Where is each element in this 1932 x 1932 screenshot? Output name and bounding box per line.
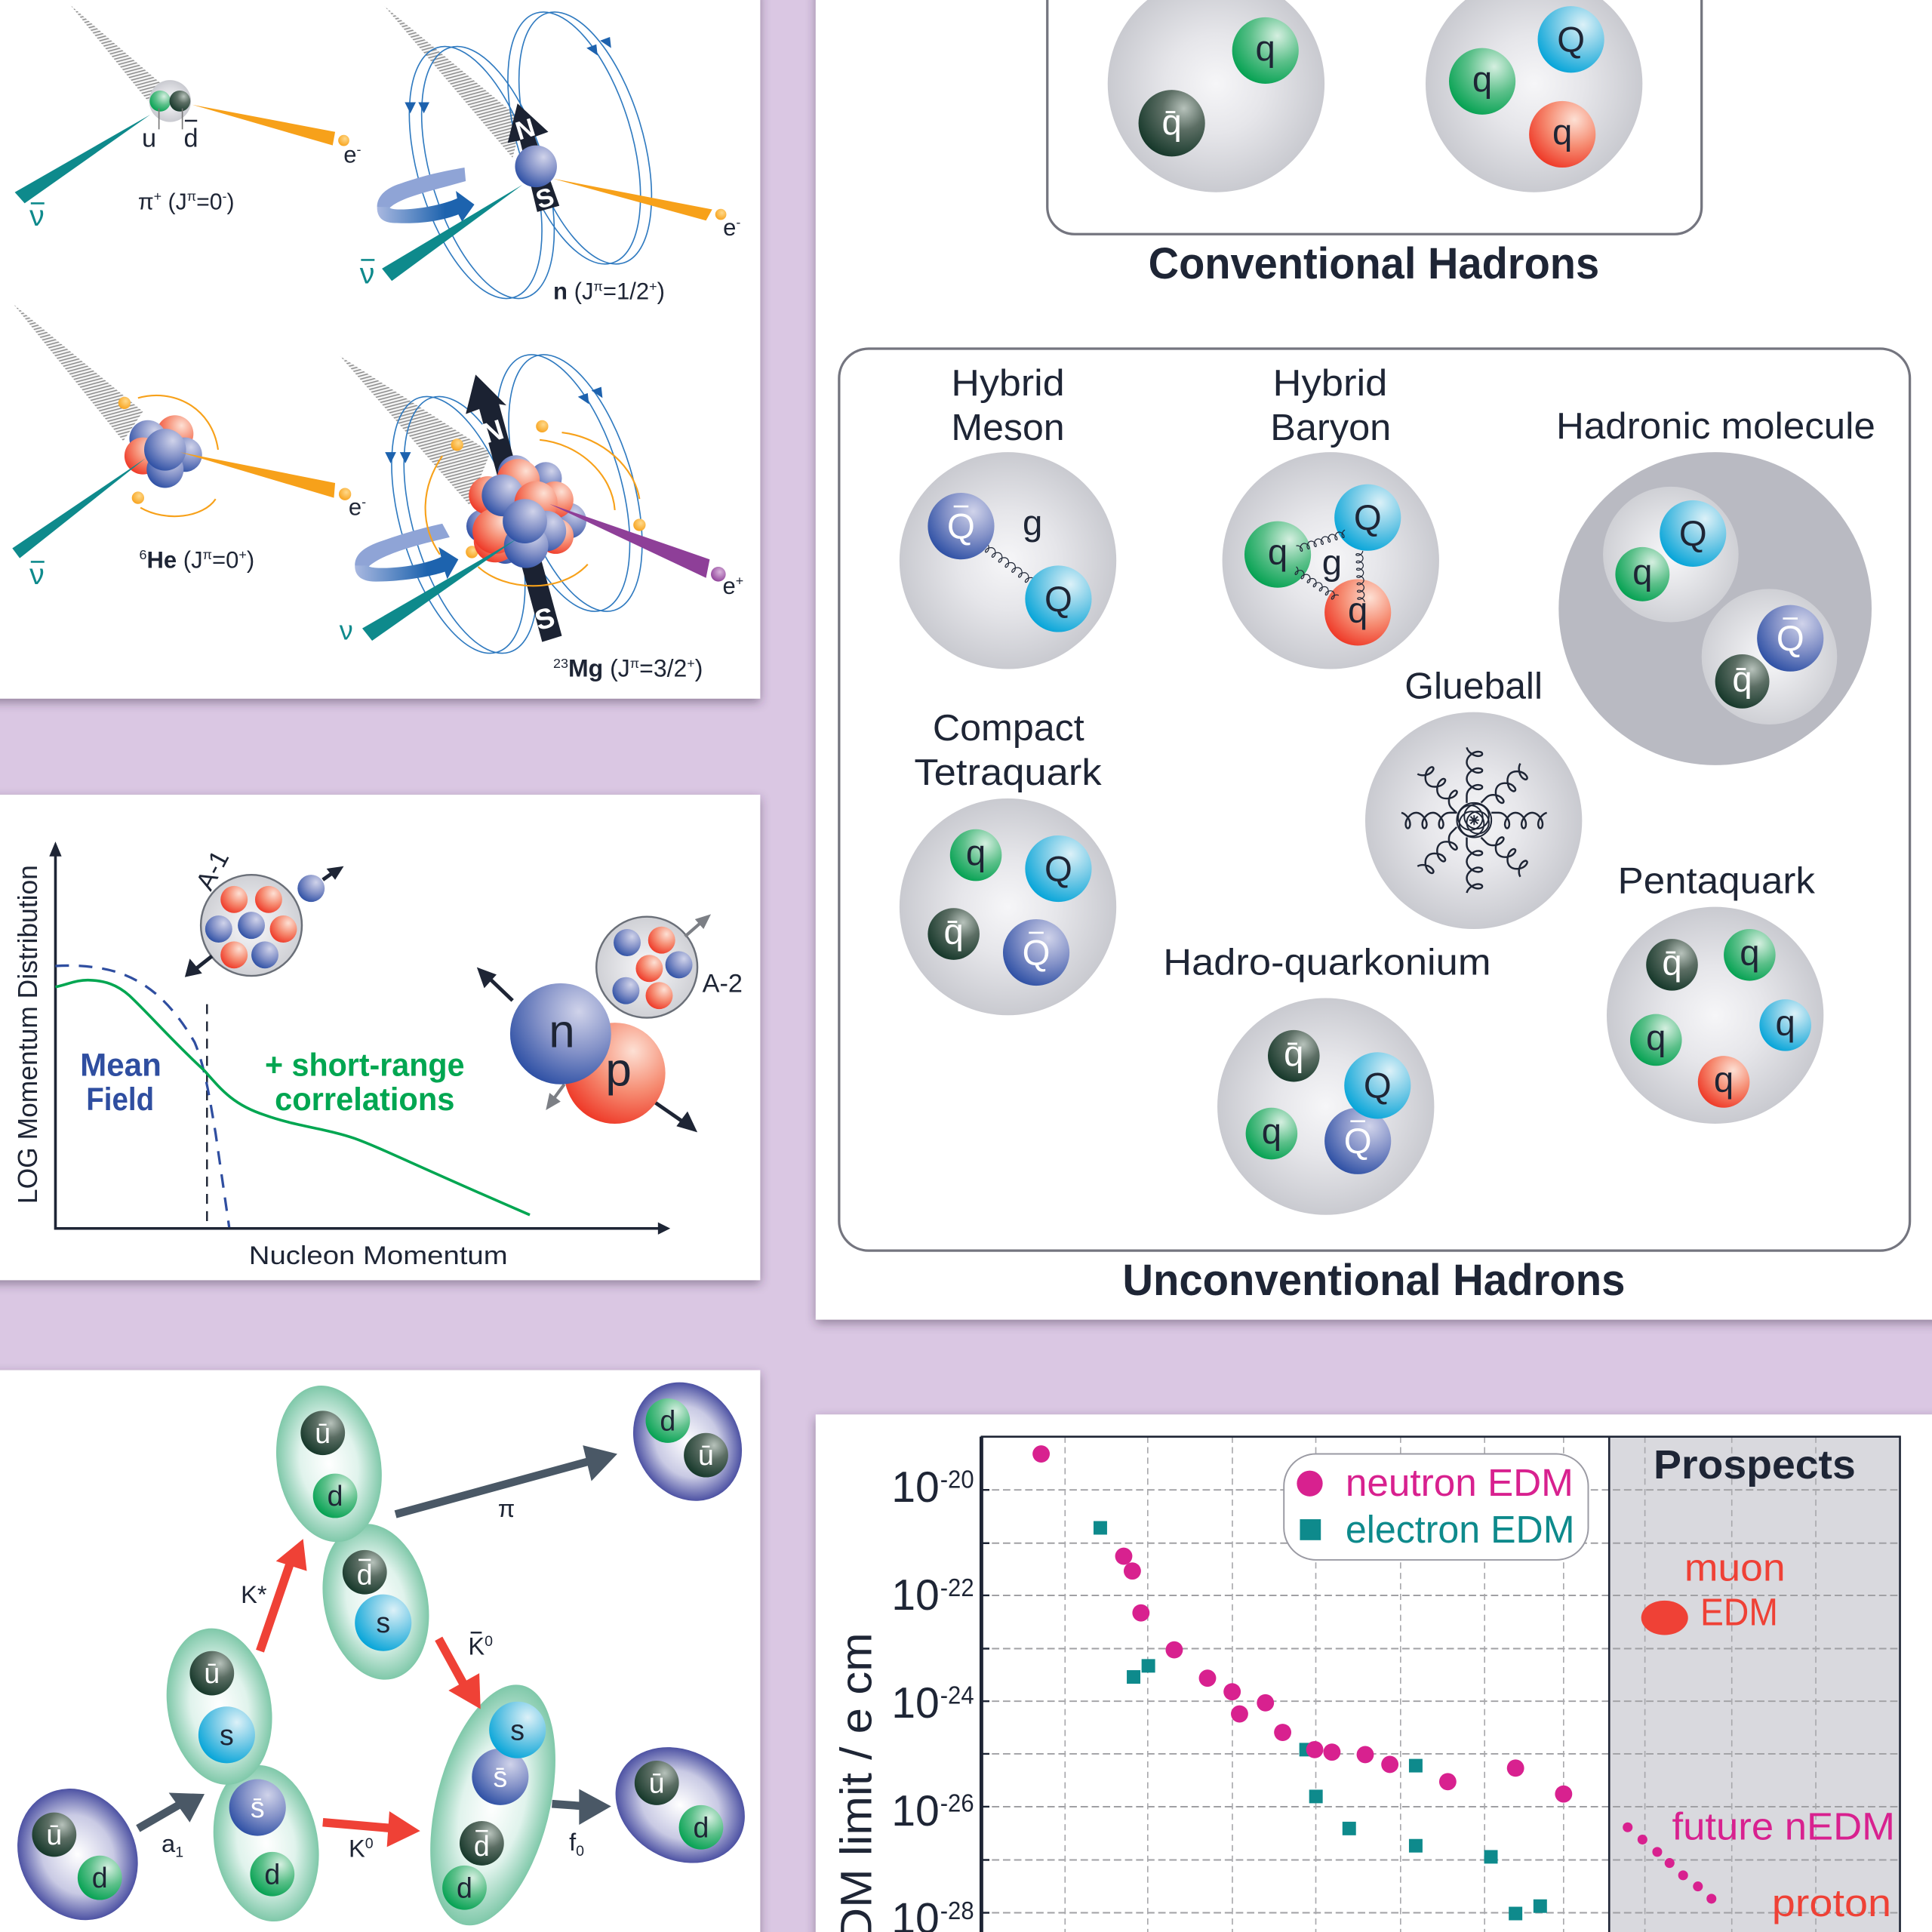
hadron: compact tetraquark: q̄ [944, 912, 964, 952]
diagram: magnesium-23 decay [340, 339, 743, 681]
A-1 nucleus [185, 846, 344, 977]
correlated n-p pair: p [605, 1044, 632, 1096]
hadron: hybrid baryon: Hybrid [1273, 363, 1387, 404]
mean field dashed curve [55, 965, 229, 1227]
diagram: pion decay: - [357, 142, 361, 157]
meson: left pair: d [264, 1858, 280, 1890]
hadron: hadronic molecule: Q [1679, 514, 1707, 554]
hadron: hadro-quarkonium: Hadro-quarkonium [1163, 942, 1491, 983]
axis title y: LOG Momentum Distribution [12, 865, 43, 1204]
hadron: pentaquark [1607, 861, 1823, 1124]
hadron: glueball: Glueball [1404, 666, 1543, 707]
meson: top d-u pair [264, 1377, 443, 1690]
hadron: hadronic molecule: q [1632, 552, 1652, 592]
grid lines [981, 1437, 1900, 1932]
panel: short-range correlations chart [0, 795, 760, 1280]
heading: conventional hadrons: Conventional Hadrons [1149, 239, 1599, 288]
diagram: pion decay: d [184, 124, 198, 152]
pion: bottom left: d [92, 1862, 108, 1894]
meson: top d-u pair: s [376, 1607, 390, 1638]
diagram: helium-6 decay: 6 [139, 547, 146, 562]
hadron: hybrid meson: g [1023, 503, 1042, 543]
diagram: neutron decay: S [533, 183, 558, 215]
diagram: neutron decay: π [593, 278, 603, 294]
plot frame [981, 1437, 1900, 1932]
meson: top d-u pair: ū [315, 1417, 331, 1449]
f0 meson: right [595, 1724, 766, 1886]
diagram: neutron decay: - [736, 214, 740, 229]
exchange labels: 0 [365, 1835, 374, 1852]
rotation ribbon [377, 168, 475, 223]
A-2 nucleus [596, 914, 743, 1018]
A-2 nucleus: A-2 [703, 969, 743, 998]
hadron: pentaquark: q [1646, 1018, 1666, 1058]
exchange labels [162, 1494, 584, 1862]
diagram: helium-6 decay: π [203, 547, 212, 562]
label short-range correlations [265, 1047, 465, 1117]
diagram: neutron decay: =1/2 [603, 278, 649, 305]
y tick labels: 10 [891, 1463, 940, 1512]
diagram: pion decay: π [138, 190, 154, 215]
diagram: pion decay: - [223, 189, 227, 204]
tetraquark ellipse: d [474, 1830, 490, 1862]
hadron: meson [1108, 0, 1324, 192]
hadron: compact tetraquark: q [966, 833, 986, 873]
future nEDM prospect [1623, 1805, 1895, 1903]
arrows: red kaon exchange [260, 1539, 481, 1847]
diagram: helium-6 decay: ) [247, 547, 254, 574]
hadron: pentaquark: q̄ [1662, 943, 1682, 983]
hadron: hybrid meson: Q [947, 506, 975, 546]
exchange labels: f [569, 1828, 576, 1856]
meson: left pair: s̄ [251, 1792, 265, 1823]
muon EDM prospect: EDM [1700, 1590, 1778, 1633]
diagram: magnesium-23 decay: Mg [568, 654, 603, 681]
diagram: neutron decay: e [723, 214, 736, 241]
hadron: hadro-quarkonium: Q [1344, 1121, 1372, 1161]
green momentum curve [55, 980, 530, 1215]
exchange labels: 1 [175, 1844, 183, 1860]
tetraquark ellipse: d [457, 1872, 472, 1903]
pion: top right: ū [698, 1439, 714, 1471]
diagram: pion decay: ν [29, 200, 45, 232]
electron EDM points [1094, 1521, 1547, 1920]
diagram: magnesium-23 decay: =3/2 [639, 654, 687, 681]
y tick labels: 10 [891, 1787, 940, 1835]
rotation ribbon [355, 524, 458, 582]
diagram: helium-6 decay: (J [183, 547, 203, 574]
hadron: hybrid baryon: Baryon [1270, 408, 1391, 448]
meson: left pair: ū [204, 1657, 220, 1689]
hadron: hadro-quarkonium [1163, 942, 1491, 1215]
diagram: helium-6 decay: e [349, 494, 361, 520]
diagram: magnesium-23 decay: ν [340, 614, 353, 645]
pion: top right [612, 1362, 763, 1521]
diagram: pion decay: e [343, 142, 357, 168]
tetraquark ellipse: s [510, 1714, 525, 1746]
diagram: helium-6 decay [12, 304, 366, 591]
diagram: pion decay [15, 5, 361, 232]
hadron: compact tetraquark: Q [1044, 849, 1072, 889]
diagram: pion decay: u [142, 124, 156, 152]
hadron: compact tetraquark: Compact [933, 708, 1084, 749]
heading: unconventional hadrons: Unconventional Hadrons [1122, 1256, 1625, 1305]
correlated n-p pair [477, 968, 697, 1132]
diagram: magnesium-23 decay: e [723, 573, 736, 599]
label mean field: Mean [80, 1047, 162, 1082]
diagram: magnesium-23 decay: 23 [553, 656, 568, 671]
label mean field: Field [86, 1081, 154, 1117]
proton label: proton [1772, 1881, 1891, 1924]
hadron: hadronic molecule: q̄ [1732, 660, 1752, 700]
axis title x: Nucleon Momentum [249, 1241, 508, 1270]
legend: neutron EDM [1346, 1461, 1574, 1504]
diagram: neutron decay: n (J [553, 278, 593, 305]
diagram: magnesium-23 decay: π [630, 656, 639, 671]
hadron: compact tetraquark [900, 708, 1116, 1015]
pion: bottom left: ū [46, 1819, 62, 1850]
tetraquark ellipse [408, 1672, 577, 1932]
y tick labels: -28 [940, 1897, 974, 1925]
panel: meson exchange diagram [0, 1362, 766, 1932]
meson: left pair [155, 1620, 331, 1930]
neutron EDM points [1032, 1445, 1572, 1803]
diagram: magnesium-23 decay: + [736, 574, 743, 589]
pion: top right: d [660, 1405, 675, 1437]
panel: hadrons [816, 0, 1932, 1320]
exchange labels: K [349, 1834, 365, 1862]
y tick labels [891, 1463, 974, 1932]
hadron: glueball [1365, 666, 1582, 929]
y tick labels: 10 [891, 1571, 940, 1620]
diagram: pion decay: + [154, 189, 162, 204]
prospects shaded region [1609, 1437, 1900, 1932]
pion: bottom left [0, 1767, 161, 1932]
hadron: hybrid meson [900, 363, 1116, 669]
hadron: hybrid baryon: q [1348, 590, 1367, 630]
diagram: helium-6 decay: ν [29, 558, 45, 591]
y tick labels: 10 [891, 1679, 940, 1727]
y tick labels: -22 [940, 1574, 974, 1602]
diagram: pion decay: ) [227, 190, 235, 215]
unconventional hadrons frame [839, 349, 1910, 1251]
diagram: helium-6 decay: + [238, 547, 247, 562]
y tick labels: -26 [940, 1789, 974, 1817]
f0 meson: right: d [694, 1811, 709, 1843]
diagram: neutron decay [360, 0, 740, 314]
A-1 nucleus: A-1 [191, 846, 235, 895]
label short-range correlations: correlations [275, 1081, 454, 1117]
hadron: pentaquark: q [1776, 1003, 1795, 1043]
hadron: hadro-quarkonium: q̄ [1284, 1034, 1303, 1074]
diagram: neutron decay: + [649, 278, 657, 294]
hadron: pentaquark: q [1714, 1060, 1734, 1100]
diagram: magnesium-23 decay: S [531, 601, 558, 636]
arrows: grey exchange [138, 1445, 617, 1829]
exchange labels: π [498, 1494, 515, 1522]
future nEDM prospect: future nEDM [1672, 1805, 1895, 1848]
meson: top d-u pair: d [328, 1480, 343, 1512]
hadron: hybrid meson: Q [1044, 580, 1072, 620]
hadron: pentaquark: Pentaquark [1618, 861, 1815, 902]
hadron: baryon [1426, 0, 1642, 192]
legend [1284, 1454, 1588, 1560]
diagram: pion decay: (J [162, 190, 187, 215]
y tick labels: -24 [940, 1681, 974, 1709]
correlated n-p pair: n [549, 1006, 575, 1058]
hadron: hybrid meson: Meson [951, 408, 1065, 448]
tetraquark ellipse: s̄ [493, 1761, 507, 1792]
hadron: hybrid baryon: g [1322, 543, 1342, 583]
hadron: hadro-quarkonium: Q [1364, 1066, 1392, 1106]
hadron: hadronic molecule: Q [1777, 619, 1804, 659]
hadron: hybrid baryon [1223, 363, 1439, 669]
hadron: baryon: q [1472, 60, 1492, 100]
diagram: neutron decay: N [512, 113, 539, 146]
hadron: baryon: q [1552, 112, 1572, 152]
diagram: neutron decay: ν [360, 258, 374, 291]
label short-range correlations: + short-range [265, 1047, 465, 1082]
conventional hadrons frame [1048, 0, 1702, 234]
exchange labels: K [468, 1632, 485, 1660]
hadron: hadronic molecule: Hadronic molecule [1556, 406, 1875, 447]
hadron: meson: q [1256, 29, 1275, 69]
muon EDM prospect: muon [1684, 1546, 1786, 1589]
nucleus [466, 455, 586, 568]
hadron: hybrid baryon: q [1268, 533, 1287, 573]
diagram: pion decay: π [187, 189, 196, 204]
exchange labels: 0 [576, 1843, 584, 1860]
hadron: baryon: Q [1557, 20, 1585, 60]
panel: beta decay of nuclei [0, 0, 760, 699]
diagram: magnesium-23 decay: ) [695, 654, 703, 681]
hadron: hybrid baryon: Q [1354, 498, 1382, 538]
meson: top d-u pair: d [357, 1559, 373, 1591]
y tick labels: -20 [940, 1466, 974, 1494]
hadron: hadronic molecule [1556, 406, 1875, 765]
panel: EDM limit chart [816, 1414, 1932, 1932]
hadron: compact tetraquark: Tetraquark [914, 752, 1102, 793]
diagram: magnesium-23 decay: + [687, 656, 695, 671]
diagram: magnesium-23 decay: N [478, 413, 507, 450]
heading: prospects: Prospects [1654, 1442, 1856, 1487]
hadron: meson: q̄ [1161, 103, 1182, 143]
diagram: helium-6 decay: =0 [212, 547, 238, 574]
hadron: pentaquark: q [1740, 933, 1760, 973]
f0 meson: right: ū [649, 1767, 665, 1799]
hadron: compact tetraquark: Q [1023, 933, 1050, 973]
meson: left pair: s [220, 1719, 234, 1751]
diagram: neutron decay: ) [657, 278, 665, 305]
hadron: hybrid meson: Hybrid [951, 363, 1065, 404]
label mean field [80, 1047, 162, 1117]
exchange labels: 0 [485, 1633, 493, 1650]
exchange labels: K* [241, 1580, 267, 1608]
chart axes [49, 841, 670, 1235]
axis tick marks [981, 1490, 989, 1913]
diagram: magnesium-23 decay: (J [610, 654, 630, 681]
vertical dashed marker [206, 1004, 208, 1229]
legend: electron EDM [1346, 1508, 1575, 1551]
exchange labels: a [162, 1829, 175, 1857]
diagram: helium-6 decay: - [361, 494, 366, 509]
diagram: pion decay: =0 [196, 190, 223, 215]
diagram: helium-6 decay: He [146, 547, 177, 574]
hadron: hadro-quarkonium: q [1262, 1112, 1281, 1152]
muon EDM prospect [1641, 1546, 1786, 1635]
